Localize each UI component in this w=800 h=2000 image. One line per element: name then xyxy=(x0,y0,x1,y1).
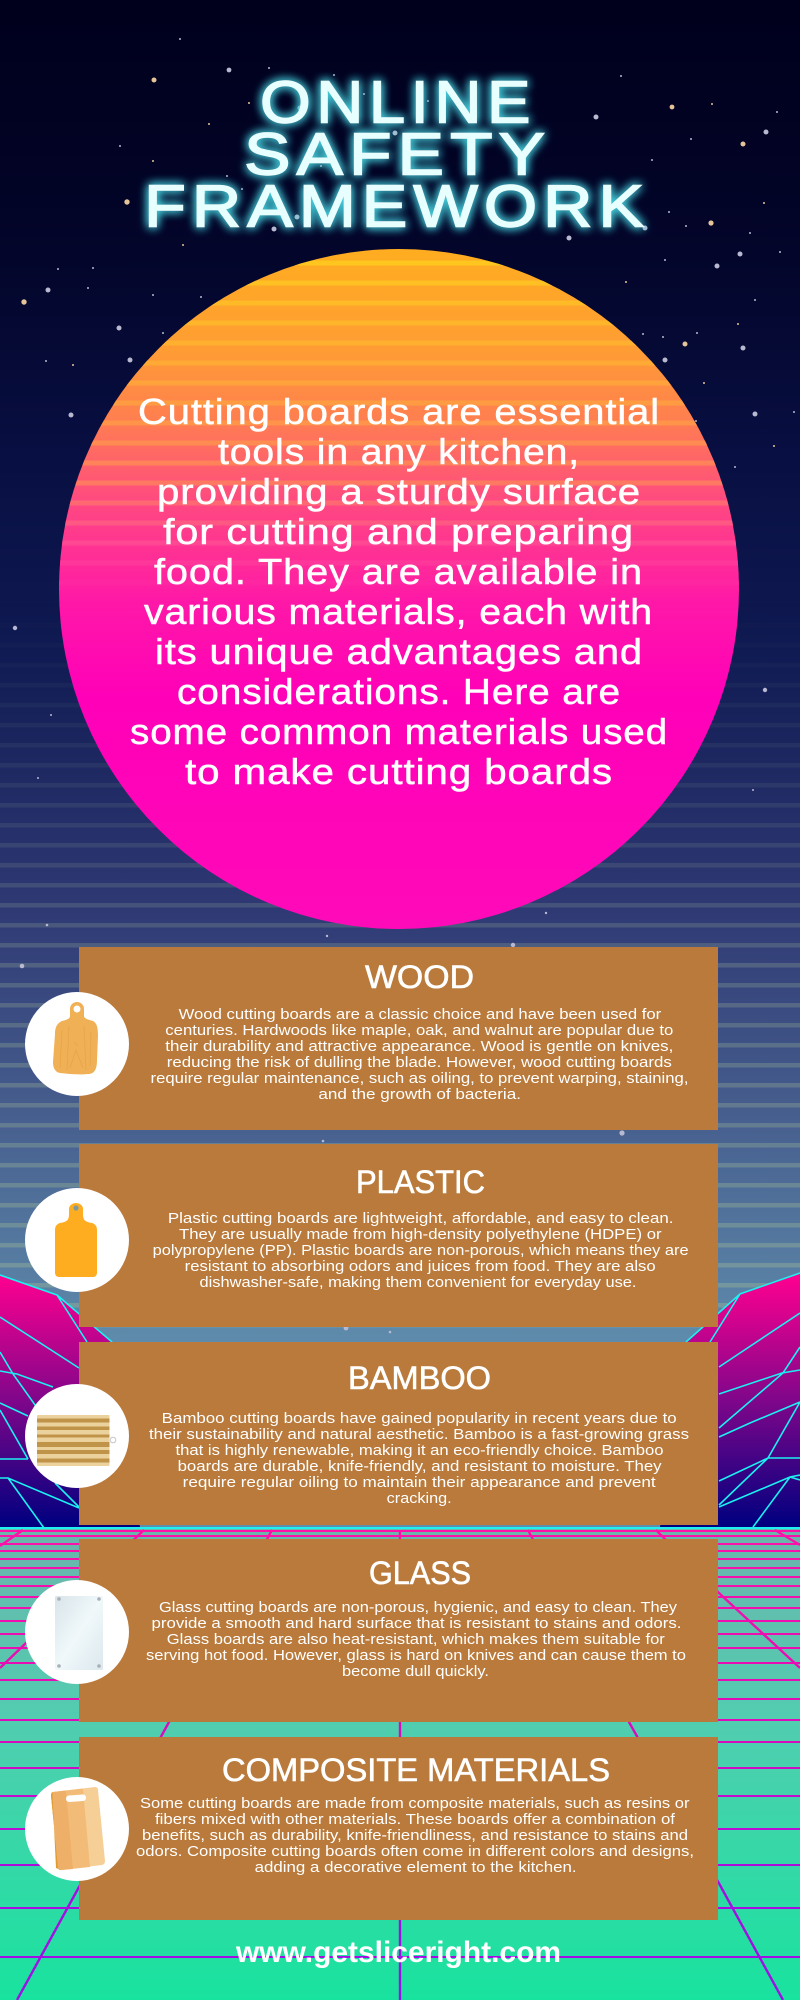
intro text xyxy=(130,391,668,792)
text: bamboo description: cracking. xyxy=(387,1490,452,1507)
icon: glass cutting board xyxy=(25,1580,129,1684)
heading: bamboo: BAMBOO xyxy=(348,1360,491,1396)
heading: composite materials: COMPOSITE MATERIALS xyxy=(222,1752,610,1788)
text: wood description: centuries. Hardwoods like maple, oak, and walnut are popular due to xyxy=(165,1022,673,1039)
intro text: to make cutting boards xyxy=(185,751,613,792)
intro text: for cutting and preparing xyxy=(163,511,634,552)
text: wood description: require regular maintenance, such as oiling, to prevent warping, staining, xyxy=(150,1070,688,1087)
text: bamboo description: boards are durable, knife-friendly, and resistant to moisture. They xyxy=(178,1458,662,1475)
text: wood description: Wood cutting boards are a classic choice and have been used for xyxy=(179,1006,661,1023)
text: wood description: their durability and attractive appearance. Wood is gentle on knives, xyxy=(165,1038,673,1055)
panel: composite materials xyxy=(25,1737,718,1920)
footer url: www.getsliceright.com xyxy=(235,1936,561,1969)
heading: plastic: PLASTIC xyxy=(356,1164,485,1200)
heading: wood: WOOD xyxy=(365,959,474,995)
panel: glass xyxy=(25,1539,718,1722)
text: plastic description: Plastic cutting boards are lightweight, affordable, and easy to clean. xyxy=(168,1210,674,1227)
title xyxy=(144,70,650,240)
panel: wood xyxy=(25,947,718,1130)
panel: plastic xyxy=(25,1144,718,1327)
text: plastic description: They are usually made from high-density polyethylene (HDPE) or xyxy=(179,1226,662,1243)
heading: glass: GLASS xyxy=(369,1555,471,1591)
intro text: providing a sturdy surface xyxy=(157,471,641,512)
text: wood description xyxy=(150,1006,688,1103)
text: glass description: serving hot food. However, glass is hard on knives and can cause them to xyxy=(146,1647,686,1664)
intro text: tools in any kitchen, xyxy=(218,431,580,472)
neon floor grid xyxy=(0,1527,800,2000)
panel: bamboo xyxy=(25,1342,718,1525)
title: SAFETY xyxy=(244,122,551,188)
background stars xyxy=(13,38,795,1333)
title: ONLINE xyxy=(260,70,536,136)
text: bamboo description: Bamboo cutting boards have gained popularity in recent years due to xyxy=(162,1410,677,1427)
intro text: considerations. Here are xyxy=(177,671,621,712)
left mountain wireframe xyxy=(0,1275,140,1528)
intro text: various materials, each with xyxy=(144,591,653,632)
text: bamboo description xyxy=(149,1410,689,1507)
intro text: Cutting boards are essential xyxy=(138,391,660,432)
right mountain wireframe xyxy=(660,1273,800,1527)
icon: composite cutting board xyxy=(25,1777,129,1881)
title: FRAMEWORK xyxy=(144,174,650,240)
text: glass description: Glass cutting boards are non-porous, hygienic, and easy to clean. They xyxy=(159,1599,678,1616)
intro text: its unique advantages and xyxy=(155,631,643,672)
text: glass description: provide a smooth and hard surface that is resistant to stains and odors. xyxy=(152,1615,682,1632)
text: composite description: fibers mixed with other materials. These boards offer a combination of xyxy=(155,1811,676,1828)
text: bamboo description: require regular oiling to maintain their appearance and prevent xyxy=(183,1474,657,1491)
text: wood description: reducing the risk of dulling the blade. However, wood cutting boards xyxy=(167,1054,672,1071)
text: composite description: Some cutting boards are made from composite materials, such as resins or xyxy=(140,1795,690,1812)
icon: bamboo cutting board xyxy=(25,1384,129,1488)
text: plastic description: dishwasher-safe, making them convenient for everyday use. xyxy=(200,1274,636,1291)
icon: wood cutting board xyxy=(25,992,129,1096)
text: composite description: benefits, such as durability, knife-friendliness, and resistance to stains and xyxy=(142,1827,688,1844)
text: composite description: odors. Composite cutting boards often come in different colors and designs, xyxy=(136,1843,694,1860)
text: plastic description xyxy=(153,1210,689,1291)
text: wood description: and the growth of bacteria. xyxy=(318,1086,521,1103)
background: night sky xyxy=(0,0,800,1530)
text: composite description: adding a decorative element to the kitchen. xyxy=(255,1859,577,1876)
text: glass description xyxy=(146,1599,686,1680)
text: bamboo description: that is highly renewable, making it an eco-friendly choice. Bamboo xyxy=(176,1442,664,1459)
sun circle xyxy=(59,249,739,929)
text: bamboo description: their sustainability and natural aesthetic. Bamboo is a fast-growing grass xyxy=(149,1426,689,1443)
text: glass description: become dull quickly. xyxy=(342,1663,489,1680)
icon: plastic cutting board xyxy=(25,1188,129,1292)
text: plastic description: polypropylene (PP). Plastic boards are non-porous, which means they are xyxy=(153,1242,689,1259)
intro text: food. They are available in xyxy=(154,551,643,592)
intro text: some common materials used xyxy=(130,711,668,752)
text: glass description: Glass boards are also heat-resistant, which makes them suitable for xyxy=(167,1631,665,1648)
text: composite description xyxy=(136,1795,694,1876)
text: plastic description: resistant to absorbing odors and juices from food. They are also xyxy=(185,1258,656,1275)
